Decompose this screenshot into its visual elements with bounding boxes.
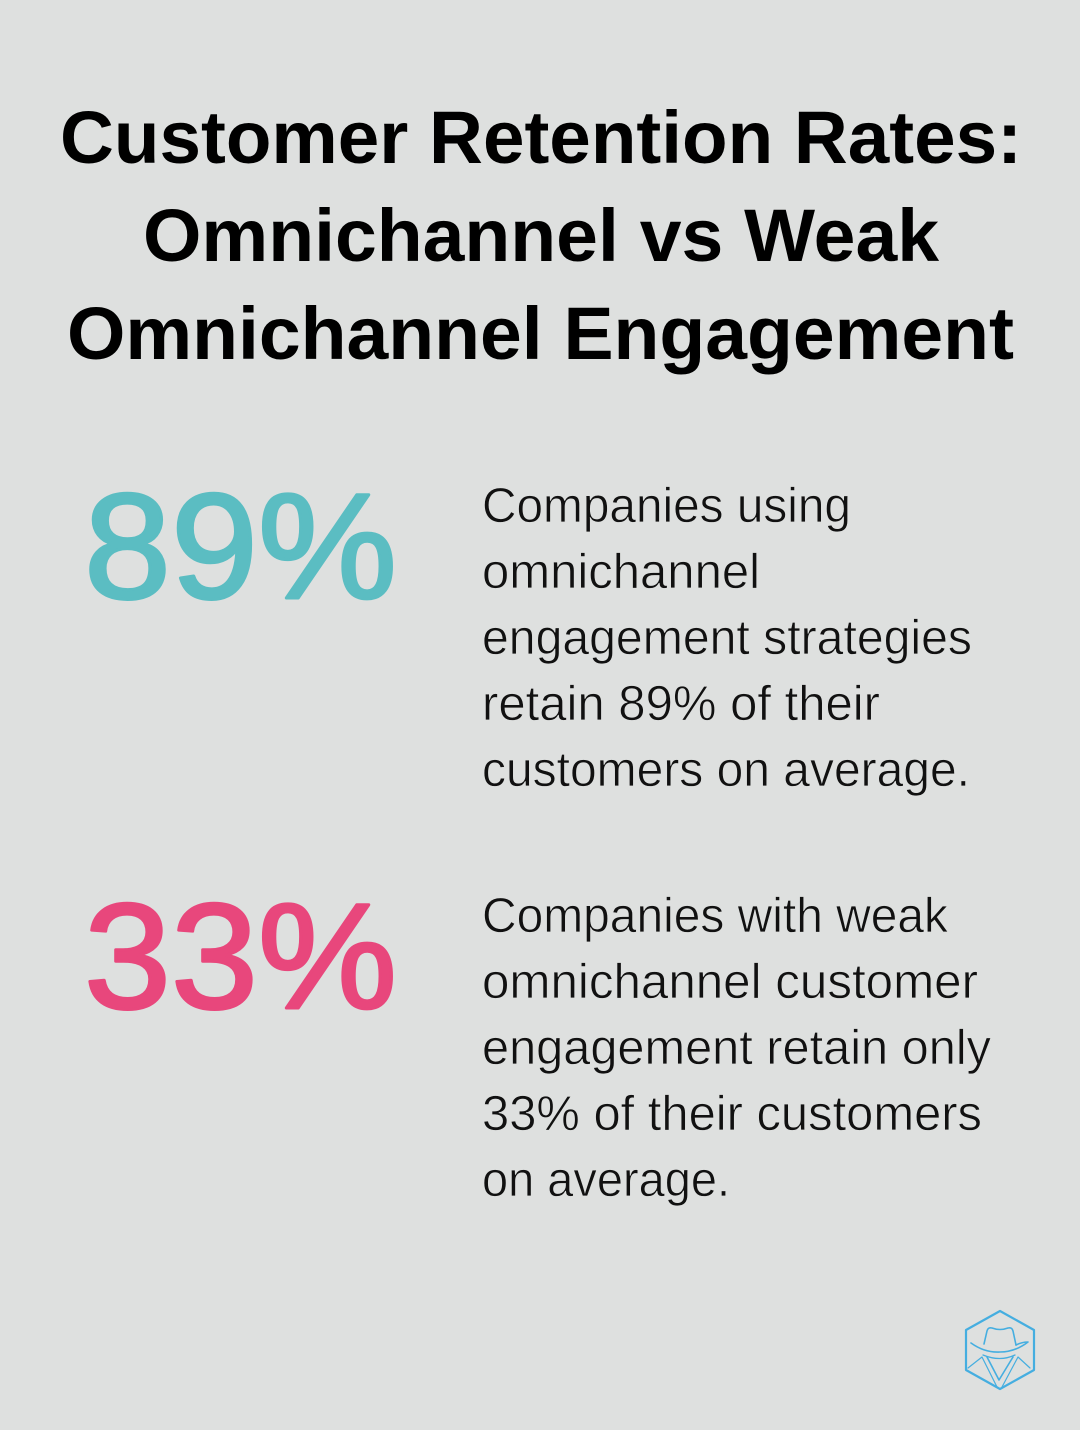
title: Omnichannel Engagement	[67, 292, 1014, 375]
text block: weak omnichannel retention description: on average.	[482, 1153, 730, 1207]
text block: weak omnichannel retention description	[482, 889, 991, 1207]
stat: 89%: 89%	[84, 462, 397, 630]
title: Omnichannel vs Weak	[143, 194, 940, 277]
text block: omnichannel retention description: omnichannel	[482, 545, 760, 599]
text block: weak omnichannel retention description: 33% of their customers	[482, 1087, 982, 1141]
text block: weak omnichannel retention description: Companies with weak	[482, 889, 948, 943]
icon: hexagon spy logo	[966, 1311, 1034, 1389]
text block: omnichannel retention description	[482, 479, 972, 797]
text block: weak omnichannel retention description: engagement retain only	[482, 1021, 991, 1075]
title: Customer Retention Rates:	[60, 96, 1022, 179]
text block: weak omnichannel retention description: omnichannel customer	[482, 955, 978, 1009]
text block: omnichannel retention description: engagement strategies	[482, 611, 972, 665]
text block: omnichannel retention description: customers on average.	[482, 743, 970, 797]
stat: 33%: 33%	[84, 872, 397, 1040]
text block: omnichannel retention description: retain 89% of their	[482, 677, 880, 731]
text block: omnichannel retention description: Companies using	[482, 479, 851, 533]
title	[60, 96, 1022, 375]
